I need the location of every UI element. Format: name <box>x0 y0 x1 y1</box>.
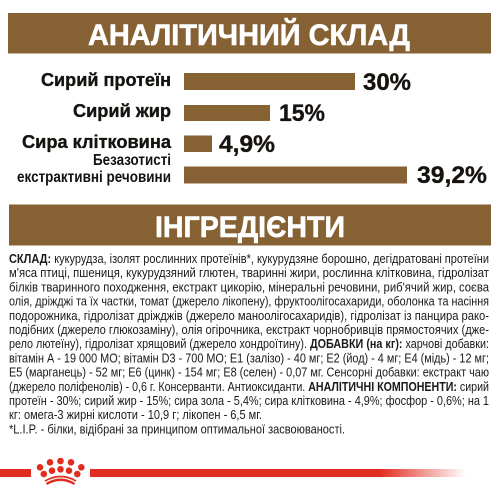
label: crude fibre: Сира клітковина <box>22 132 172 152</box>
value: crude protein: 30% <box>363 69 411 96</box>
footer line <box>0 469 466 477</box>
text block: ingredients list <box>9 252 489 436</box>
heading band: ingredients <box>9 204 491 246</box>
label: crude fat: Сирий жир <box>73 101 171 121</box>
heading band: analytical composition <box>8 13 491 54</box>
panel: analytical composition <box>8 13 491 189</box>
label: nitrogen-free extractives: екстрактивні речовини <box>17 169 171 186</box>
bar: crude protein <box>184 73 355 90</box>
label: nitrogen-free extractives: Безазотисті <box>93 152 171 169</box>
label: crude protein: Сирий протеїн <box>41 70 171 90</box>
icon: royal crown logo <box>37 458 85 484</box>
heading band: ingredients: ІНГРЕДІЄНТИ <box>155 211 345 244</box>
text block: ingredients list: *L.I.P. - білки, відібрані за принципом оптимальної засвоюваності. <box>9 422 345 436</box>
value: crude fibre: 4,9% <box>219 131 275 158</box>
bar: nitrogen-free extractives <box>184 166 407 184</box>
bar: crude fat <box>184 105 270 121</box>
value: crude fat: 15% <box>279 100 325 127</box>
text block: ingredients list: кг: омега-3 жирні кислоти - 10,9 г; лікопен - 6,5 мг. <box>9 408 262 422</box>
value: nitrogen-free extractives: 39,2% <box>417 162 487 189</box>
text block: ingredients list: рело лютеїну), гідролізат хрящовий (джерело хондроїтину). ДОБАВКИ (на кг): харчові добавки: <box>9 337 489 351</box>
text block: ingredients list: (джерело поліфенолів) - 0,6 г. Консерванти. Антиоксиданти. АНАЛІТИЧНІ КОМПОНЕНТИ: сирий <box>9 380 489 394</box>
heading band: analytical composition: АНАЛІТИЧНИЙ СКЛАД <box>88 18 410 52</box>
bar: crude fibre <box>184 136 212 152</box>
label: nitrogen-free extractives <box>17 152 171 186</box>
